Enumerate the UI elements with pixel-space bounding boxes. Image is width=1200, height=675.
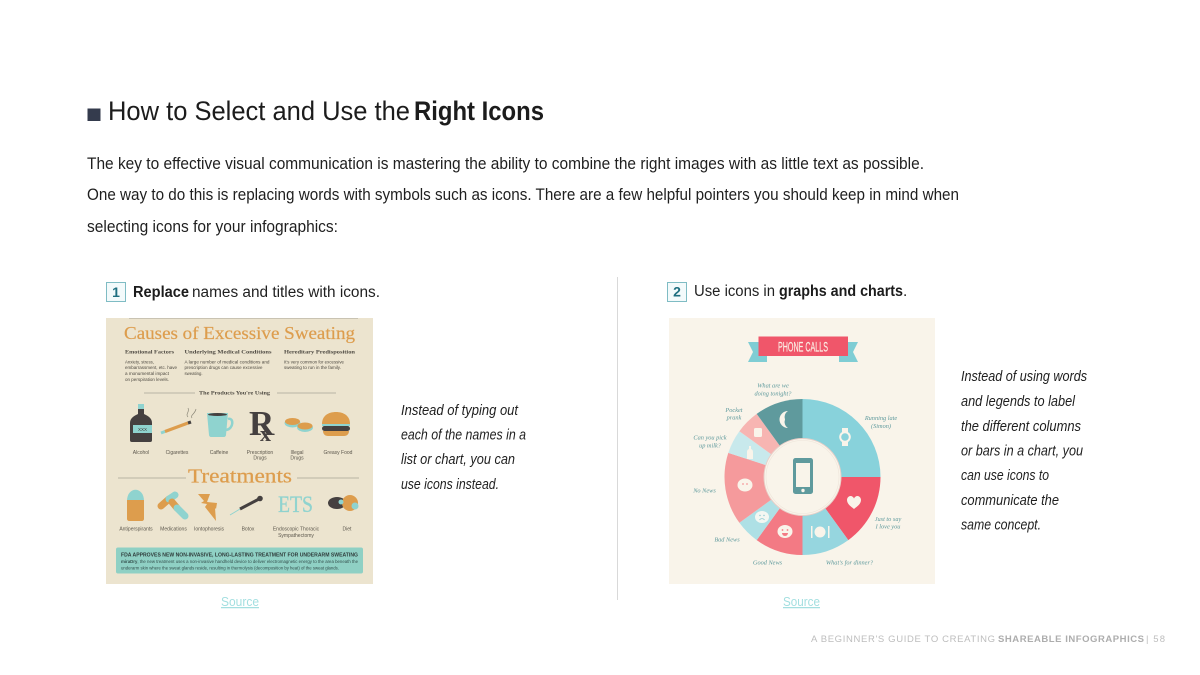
wheel labels: Just to say <box>875 516 901 523</box>
footer: A BEGINNER'S GUIDE TO CREATING <box>811 634 995 645</box>
icon: no news chat bubble <box>738 478 752 492</box>
chart: phone calls wheel <box>725 399 880 555</box>
wheel labels: (Simon) <box>871 423 891 430</box>
heading: causes: Causes of Excessive Sweating <box>124 323 355 343</box>
causes text columns: sweating. <box>184 371 202 376</box>
causes text columns: on perspiration levels. <box>125 377 169 382</box>
tip 2 description: or bars in a chart, you <box>961 444 1083 460</box>
causes text columns: a monumental impact <box>125 371 170 376</box>
intro text block: The key to effective visual communication is mastering the ability to combine the right images with as little text as possible. <box>87 155 924 173</box>
treatment labels: Diet <box>343 526 352 532</box>
treatment labels: Botox <box>242 526 255 532</box>
wheel labels: No News <box>692 488 716 494</box>
product labels: Drugs <box>253 456 267 462</box>
icon: plate and cutlery <box>811 526 830 538</box>
causes text columns: Underlying Medical Conditions <box>184 350 272 356</box>
icon: prescription symbol: x <box>260 421 271 446</box>
wheel labels: Running late <box>864 415 897 422</box>
icon: good news chat face <box>778 525 792 538</box>
causes text columns: Emotional Factors <box>125 350 174 356</box>
causes text columns: prescription drugs can cause excessive <box>184 365 263 370</box>
treatment labels: Antiperspirants <box>119 526 153 532</box>
tip 2 description: and legends to label <box>961 394 1076 410</box>
icon: watch <box>839 428 851 446</box>
treatment labels <box>119 526 352 539</box>
causes text columns: It's very common for excessive <box>284 360 345 364</box>
icon: burger <box>322 412 350 436</box>
tip 1 description: each of the names in a <box>401 428 526 444</box>
wheel labels: What's for dinner? <box>826 560 874 566</box>
wheel labels: Pocket <box>724 407 743 414</box>
tip 2 heading: . <box>903 283 907 300</box>
product labels: Caffeine <box>210 450 228 456</box>
intro text block <box>87 155 959 236</box>
icon: cigarette <box>161 408 196 433</box>
tip 2 description: communicate the <box>961 493 1059 509</box>
icon: medication capsules <box>161 495 185 516</box>
treatment labels: Endoscopic Thoracic <box>273 526 320 532</box>
banner: phone calls <box>748 336 858 362</box>
heading: treatments: Treatments <box>188 466 292 488</box>
icon: botox syringe <box>230 496 263 515</box>
wheel labels: doing tonight? <box>755 390 792 398</box>
causes text columns: A large number of medical conditions and <box>184 360 270 364</box>
tip 1 description <box>401 403 526 493</box>
wheel labels: prank <box>726 414 742 422</box>
icon: lightning bolt <box>198 494 217 521</box>
wheel labels: up milk? <box>699 442 722 450</box>
wheel labels <box>692 382 901 566</box>
causes text columns: embarrassment, etc. have <box>125 365 178 370</box>
tip 1 description: list or chart, you can <box>401 452 515 468</box>
callout: FDA approval: FDA APPROVES NEW NON-INVASIVE, LONG-LASTING TREATMENT FOR UNDERARM SWEATING <box>121 552 358 558</box>
product labels: Drugs <box>290 456 304 462</box>
panel: causes of excessive sweating infographic <box>106 318 373 584</box>
causes text columns <box>125 350 355 382</box>
callout: FDA approval <box>116 548 363 574</box>
icon: pocket bag <box>754 428 762 437</box>
icon: alcohol bottle: XXX <box>138 427 147 432</box>
product labels: Prescription <box>247 450 273 456</box>
product labels: Cigarettes <box>166 450 189 456</box>
product labels: Illegal <box>290 450 304 456</box>
icon: coffee mug <box>207 413 232 437</box>
causes text columns: sweating to run in the family. <box>284 365 341 370</box>
tip 1 description: use icons instead. <box>401 477 499 493</box>
treatment labels: Medications <box>160 526 187 532</box>
tip 1 heading <box>106 282 380 302</box>
tip 1 heading: names and titles with icons. <box>192 284 380 301</box>
tip 2 heading <box>668 282 907 302</box>
icon: antiperspirant <box>127 490 144 521</box>
callout: FDA approval: miraDry, the new treatment uses a non-invasive handheld device to deliver electromagnetic energy to the area beneath the <box>121 559 359 564</box>
icon: moon <box>780 411 788 428</box>
footer: | 58 <box>1146 634 1165 645</box>
wheel labels: Can you pick <box>693 434 727 442</box>
tip 2 heading: 2 <box>673 284 681 300</box>
tip 2 description: can use icons to <box>961 468 1049 484</box>
tip 2 heading: graphs and charts <box>779 283 903 300</box>
icon: title bullet square <box>88 108 100 121</box>
banner: phone calls: PHONE CALLS <box>778 338 828 354</box>
footer <box>811 634 1165 645</box>
wheel labels: What are we <box>757 382 789 390</box>
wheel labels: Good News <box>753 560 783 566</box>
treatment labels: Sympathectomy <box>278 533 314 539</box>
tip 2 heading: Use icons in <box>694 283 775 300</box>
icon: prescription symbol: R <box>249 404 275 443</box>
icon: milk bottle <box>747 446 753 459</box>
tip 1 heading: Replace <box>133 284 189 301</box>
product labels: Alcohol <box>133 450 149 456</box>
treatment labels: Iontophoresis <box>194 526 225 532</box>
footer: SHAREABLE INFOGRAPHICS <box>998 634 1144 645</box>
tip 2 description: Instead of using words <box>961 369 1087 385</box>
tip 2 description: same concept. <box>961 518 1041 534</box>
icon: heart <box>847 496 861 509</box>
causes text columns: Anxiety, stress, <box>125 360 154 364</box>
product labels <box>133 450 353 462</box>
wheel labels: Bad News <box>714 536 740 544</box>
icon: bad news chat face <box>755 511 769 523</box>
icon: phone <box>793 458 813 494</box>
panel: phone calls infographic <box>669 318 935 584</box>
intro text block: selecting icons for your infographics: <box>87 218 338 236</box>
icon: alcohol bottle <box>130 404 152 442</box>
tip 2 description <box>961 369 1087 534</box>
tip 1 heading: 1 <box>112 284 120 300</box>
source link 1: Source <box>221 595 259 609</box>
icon: diet food <box>328 495 358 511</box>
product labels: Greasy Food <box>324 450 353 456</box>
tip 2 description: the different columns <box>961 419 1081 435</box>
source link 2: Source <box>783 595 820 609</box>
tip 1 description: Instead of typing out <box>401 403 519 419</box>
icon: pills <box>284 418 313 432</box>
intro text block: One way to do this is replacing words with symbols such as icons. There are a few helpful pointers you should keep in mind when <box>87 186 959 204</box>
causes text columns: Hereditary Predisposition <box>284 350 355 356</box>
icon: ETS letters: ETS <box>278 492 313 517</box>
title: Right Icons <box>414 96 544 126</box>
wheel labels: I love you <box>875 524 900 530</box>
subheading: products: The Products You're Using <box>199 392 271 396</box>
title: How to Select and Use the <box>108 96 410 126</box>
callout: FDA approval: underarm skin where the sweat glands reside, resulting in thermolysis (decomposition by heat) of the sweat glands. <box>121 566 339 570</box>
